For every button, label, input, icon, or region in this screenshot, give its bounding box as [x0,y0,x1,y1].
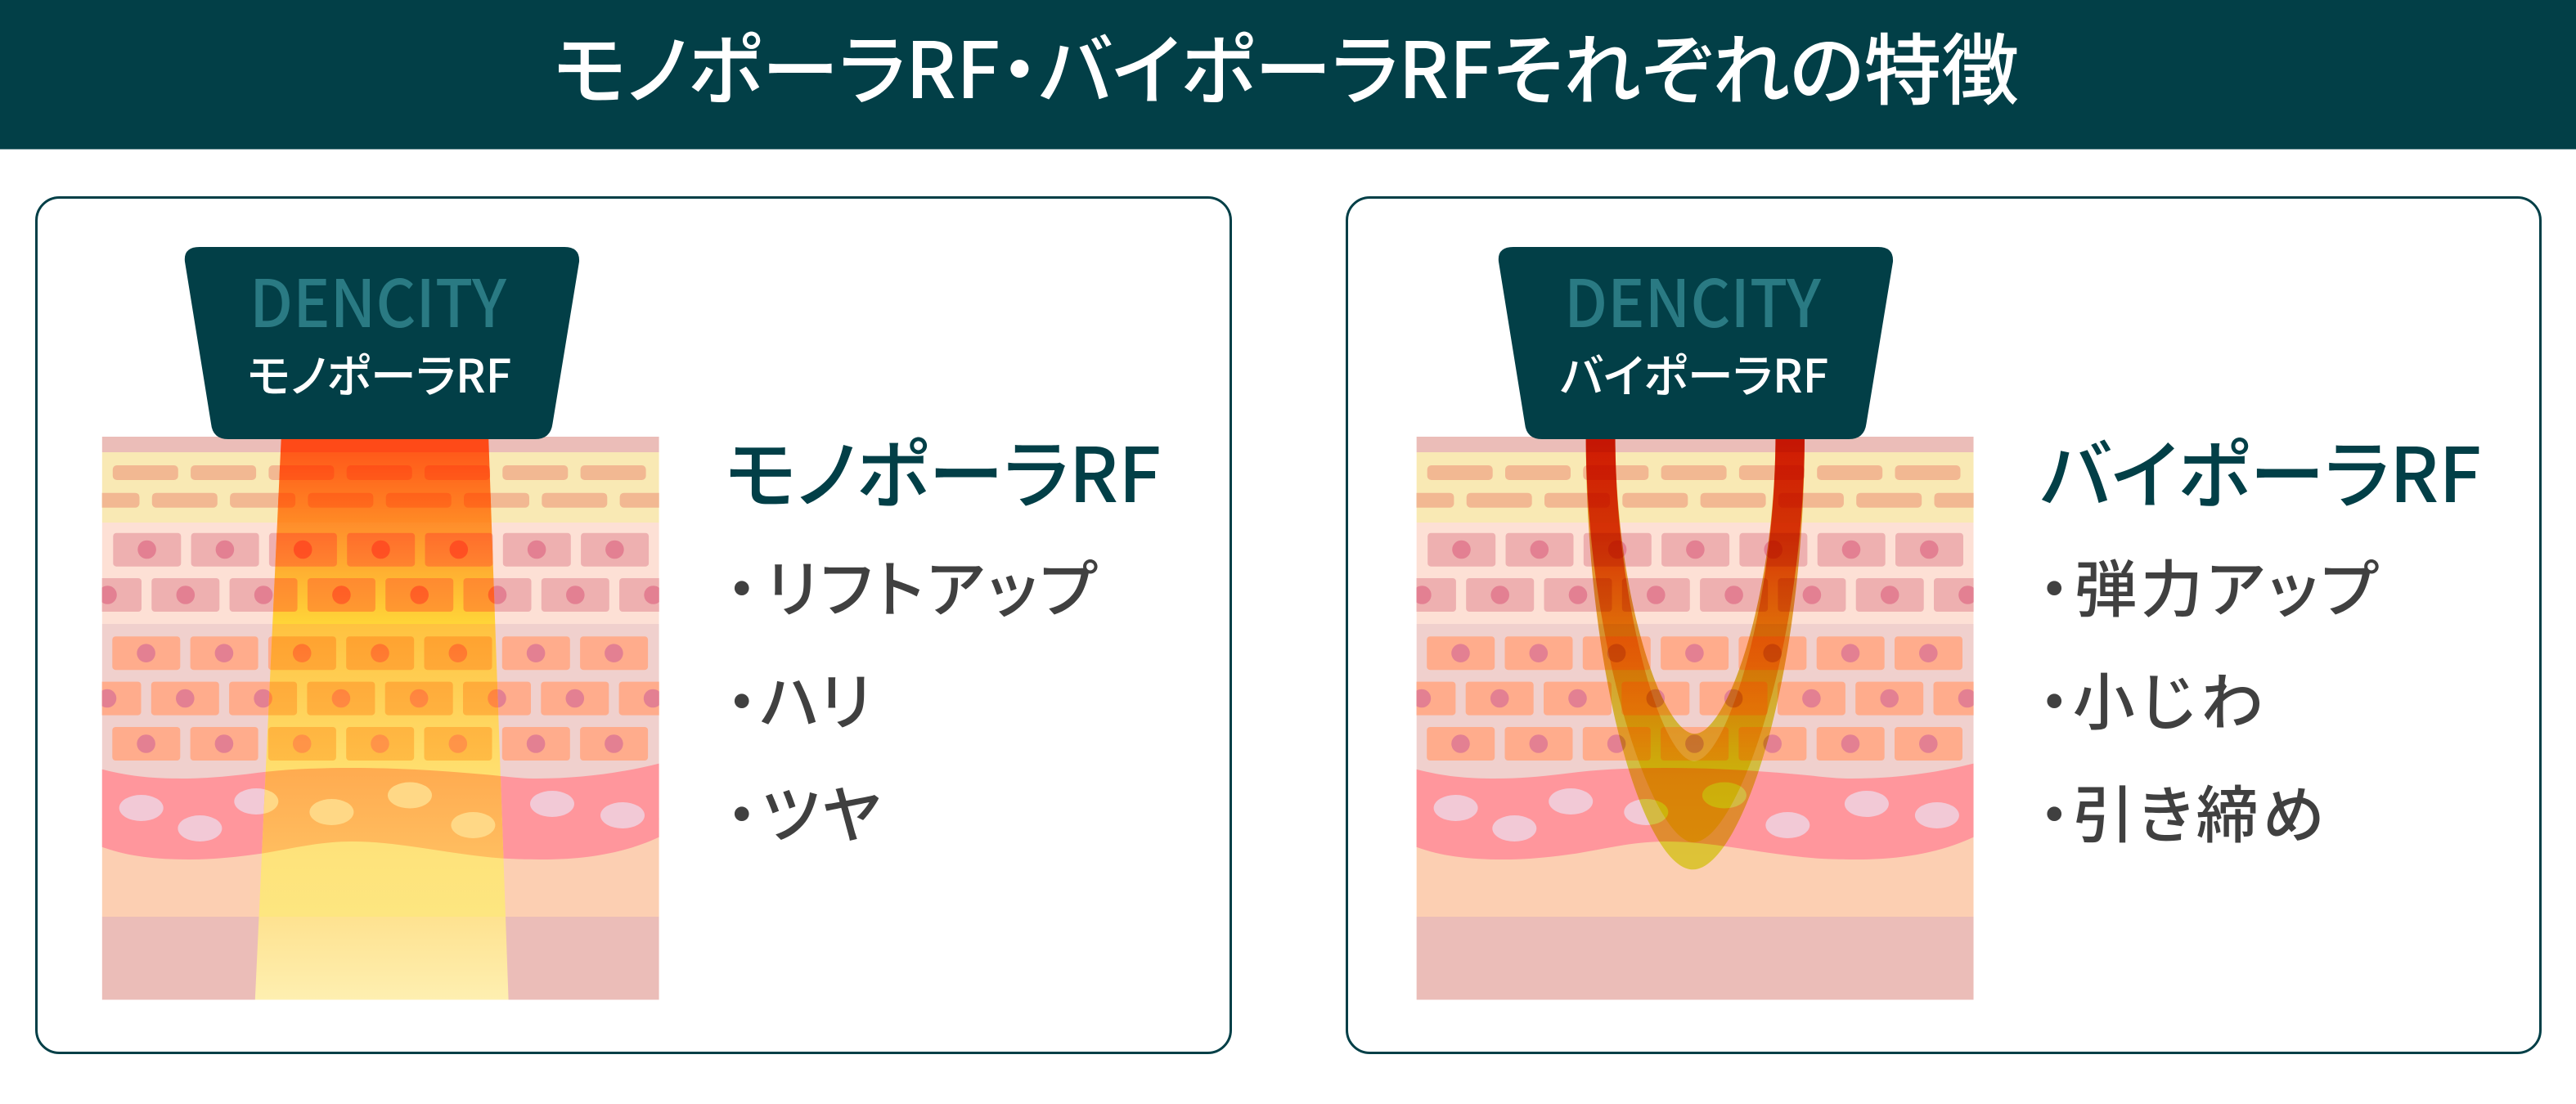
heading: monopolar RF: モノポーラRF [725,415,1161,524]
panel: bipolar RF [1346,198,2541,1053]
benefit list: ・小じわ [2039,653,2269,743]
benefit list: ・弾力アップ [2039,540,2382,630]
heat beam: inner U-shaped current path [1586,433,1805,842]
benefit list: ・引き締め [2039,765,2327,855]
heat beam: outer U-shaped current path [1586,433,1805,869]
title banner [0,0,2576,149]
device brand: DENCITY [250,252,507,347]
benefit list [726,540,1100,855]
skin cross-section diagram [74,437,687,1000]
device mode label: モノポーラRF [247,340,511,406]
device head [185,247,579,439]
benefit list: ・リフトアップ [726,540,1100,630]
device head [1499,247,1893,439]
device mode label: バイポーラRF [1560,340,1828,406]
title: モノポーラRF・バイポーラRFそれぞれの特徴 [553,9,2019,121]
benefit list: ・ツヤ [726,765,883,855]
benefit list: ・ハリ [726,653,870,743]
skin cross-section diagram [1387,437,2002,1000]
benefit list [2039,540,2382,855]
device brand: DENCITY [1564,252,1822,347]
panel: monopolar RF [36,198,1230,1053]
heading: bipolar RF: バイポーラRF [2040,415,2481,524]
heat beam: wide column through all skin layers [255,439,509,999]
